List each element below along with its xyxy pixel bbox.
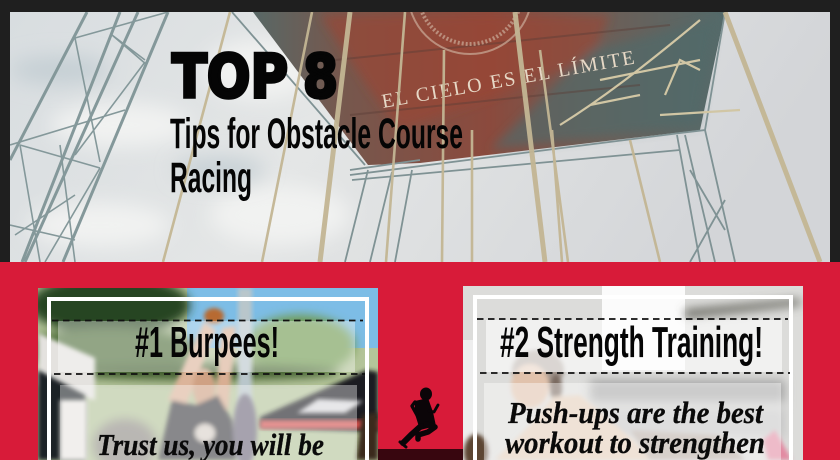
dashed rules: tip 2 [477, 319, 790, 373]
subtitle: tips heading [170, 110, 463, 202]
dashed rules: tip 1 [52, 320, 365, 374]
band: title backing [58, 321, 355, 372]
frame: white border [475, 297, 791, 460]
title: TOP 8: 8 [303, 42, 338, 112]
body text: tip 2: Push-ups are the best [507, 395, 764, 430]
panel: hero photo of obstacle rig: EL CIELO ES EL LÍMITE [380, 46, 636, 113]
ground bar under runner [378, 449, 463, 460]
photo: woman doing push-ups in gym [463, 286, 803, 460]
panel: tip 1 burpees [38, 288, 378, 460]
subtitle: tips heading: Racing [170, 154, 252, 202]
body text: tip 2 [505, 395, 765, 460]
band: body backing [60, 385, 357, 460]
heading: #1 Burpees!: #1 Burpees! [135, 318, 279, 367]
band: body backing [484, 383, 781, 460]
subtitle: tips heading: Tips for Obstacle Course [170, 110, 463, 158]
frame: white border [49, 299, 367, 460]
photo: athlete with raised arms [38, 288, 378, 460]
title: TOP 8: TOP [172, 42, 288, 112]
body text: tip 2: workout to strengthen [505, 425, 765, 460]
panel: red section background [0, 262, 840, 460]
band: title backing [486, 320, 782, 372]
panel: hero photo of obstacle rig [10, 0, 830, 262]
icon: running figure silhouette [400, 388, 438, 447]
panel: tip 2 strength training [463, 286, 803, 460]
